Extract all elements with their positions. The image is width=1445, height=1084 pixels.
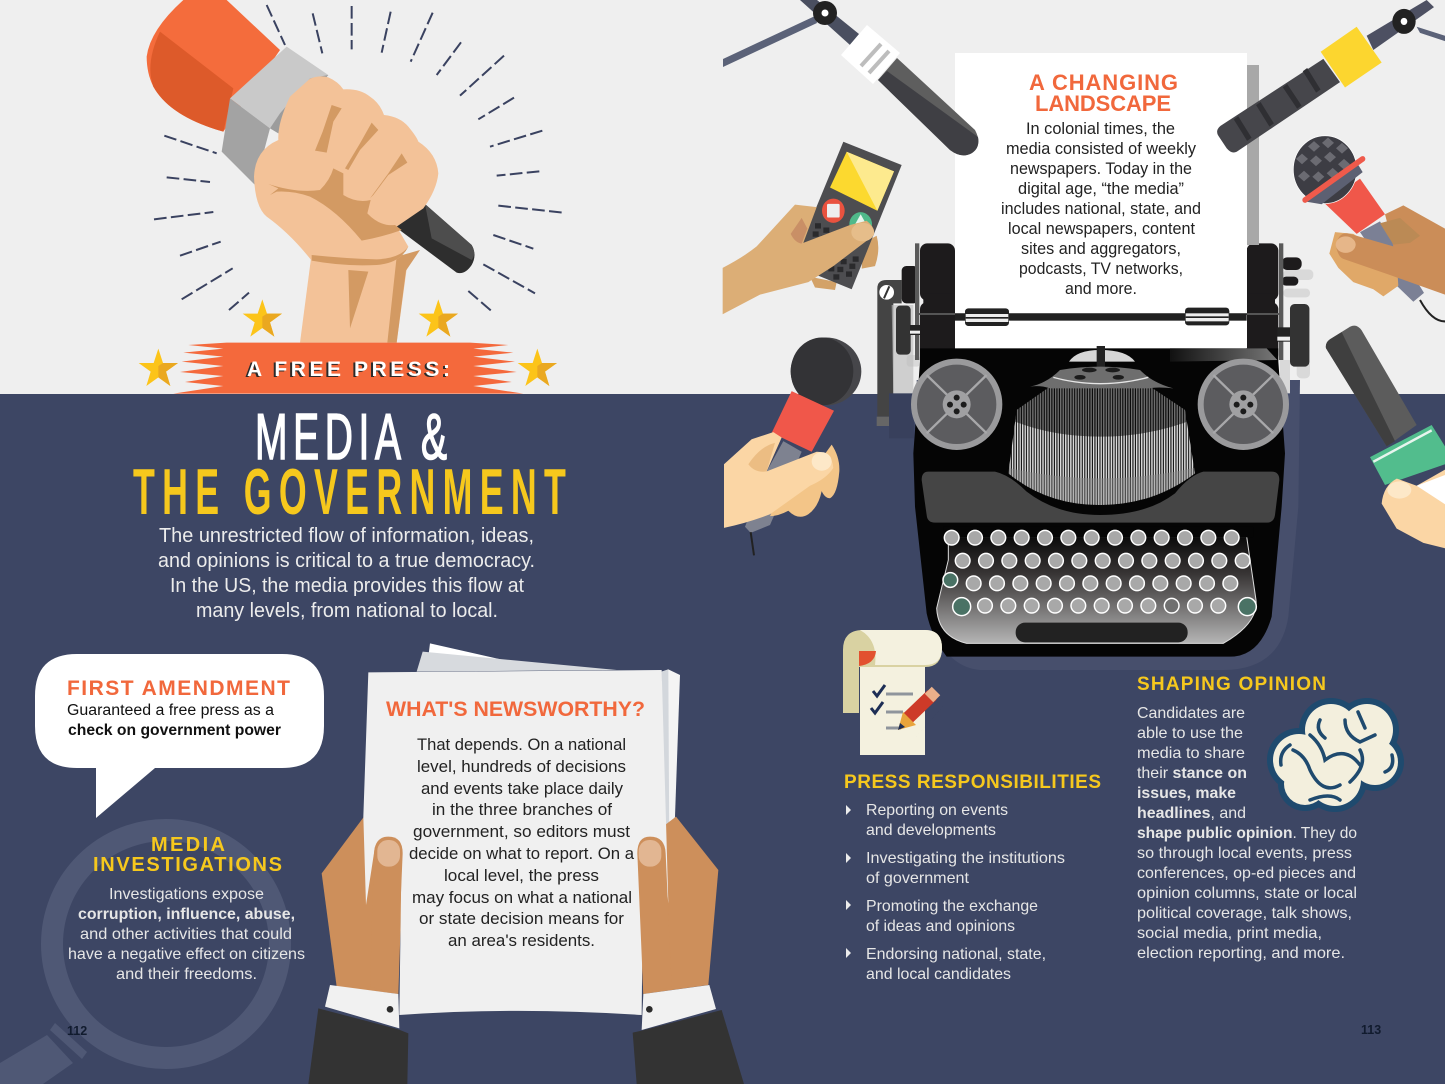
front panel	[922, 472, 1279, 523]
landscape text: In colonial times, the	[1026, 119, 1175, 138]
mic head	[147, 0, 280, 132]
boom thin arm	[723, 16, 817, 67]
heading: first amendment: FIRST AMENDMENT	[67, 677, 290, 700]
yellow band	[1321, 27, 1382, 87]
list lines	[886, 694, 913, 728]
thumbs	[370, 837, 672, 994]
intro paragraph: The unrestricted flow of information, ideas,	[159, 525, 534, 547]
white band	[841, 25, 900, 84]
illustration: hands holding newspaper	[308, 643, 744, 1084]
brain outline	[1267, 698, 1404, 812]
mic handle	[395, 203, 474, 273]
responsibilities list: Investigating the institutions	[866, 850, 1065, 867]
carriage lever	[877, 280, 914, 438]
top mask for deck edge	[943, 527, 1253, 537]
keys	[943, 530, 1256, 616]
responsibilities list: and developments	[866, 822, 996, 839]
landscape text: newspapers. Today in the	[1010, 159, 1192, 178]
boom joint	[813, 1, 837, 25]
platen knobs	[896, 304, 1309, 367]
bubble text: Guaranteed a free press as a	[67, 702, 274, 719]
landscape text: local newspapers, content	[1008, 219, 1195, 238]
scroll curl	[843, 630, 942, 713]
opinion text: their stance on	[1137, 765, 1247, 782]
investigations text: and other activities that could	[80, 926, 292, 943]
newspaper sheet	[363, 670, 668, 1015]
title	[133, 401, 566, 529]
recorder screen	[830, 152, 894, 211]
opinion text: shape public opinion. They do	[1137, 825, 1357, 842]
newsworthy text: and events take place daily	[421, 779, 623, 798]
responsibilities list	[866, 802, 1065, 983]
newsworthy text: government, so editors must	[413, 822, 630, 841]
opinion text: able to use the	[1137, 725, 1243, 742]
hand	[724, 432, 833, 528]
fist	[254, 76, 438, 265]
fingers	[770, 445, 839, 517]
forearm	[300, 250, 420, 343]
ribbon banner	[173, 343, 523, 394]
opinion text: social media, print media,	[1137, 925, 1322, 942]
opinion text: so through local events, press	[1137, 845, 1352, 862]
responsibilities list: Reporting on events	[866, 802, 1008, 819]
newsworthy text: or state decision means for	[419, 909, 624, 928]
illustration: mesh microphone and hand	[1293, 136, 1445, 321]
background: navy lower area	[0, 394, 1445, 1084]
panel: a changing landscape	[1001, 70, 1201, 298]
responsibilities list: of ideas and opinions	[866, 918, 1015, 935]
scroll page	[860, 665, 925, 755]
heading: press responsibilities: PRESS RESPONSIBILITIES	[844, 772, 1101, 793]
newsworthy text: may focus on what a national	[412, 888, 632, 907]
newsworthy text: level, hundreds of decisions	[417, 757, 626, 776]
check marks	[871, 685, 885, 713]
investigations text: corruption, influence, abuse,	[78, 906, 295, 923]
background knob shadows	[907, 269, 1313, 393]
mic body	[1326, 326, 1417, 446]
pencil	[898, 691, 946, 738]
heading: media investigations: INVESTIGATIONS	[93, 854, 282, 876]
opinion text: opinion columns, state or local	[1137, 885, 1357, 902]
opinion text: issues, make	[1137, 785, 1236, 802]
newsworthy text: in the three branches of	[432, 800, 612, 819]
opinion text: election reporting, and more.	[1137, 945, 1345, 962]
investigations text: Investigations expose	[109, 886, 264, 903]
investigations text: have a negative effect on citizens	[68, 946, 305, 963]
responsibilities list: of government	[866, 870, 970, 887]
cord	[1420, 300, 1445, 321]
typewriter front	[913, 308, 1286, 657]
illustration: hand holding recorder	[723, 142, 902, 314]
landscape text: sites and aggregators,	[1021, 239, 1181, 258]
illustration: top-right boom microphone	[1217, 0, 1445, 153]
landscape text: and more.	[1065, 279, 1137, 298]
intro paragraph: many levels, from national to local.	[196, 600, 498, 622]
panel: first amendment speech bubble	[35, 654, 324, 818]
recorder buttons	[822, 199, 872, 236]
landscape text: digital age, “the media”	[1018, 179, 1184, 198]
mic head	[791, 337, 861, 405]
opinion text: Candidates are	[1137, 705, 1245, 722]
boom arm	[1367, 0, 1434, 50]
opinion text	[1137, 705, 1357, 962]
title: MEDIA &	[255, 401, 447, 474]
panel: shaping opinion	[1137, 674, 1357, 962]
hand	[723, 205, 874, 314]
carriage blocks	[902, 243, 1302, 362]
background: top band	[0, 0, 1445, 394]
heading: shaping opinion: SHAPING OPINION	[1137, 674, 1326, 695]
handle	[878, 58, 978, 155]
mesh head	[1293, 136, 1363, 204]
green sleeve	[1370, 425, 1445, 485]
paper in typewriter	[955, 53, 1247, 348]
heading: a changing landscape: A CHANGING	[1029, 70, 1178, 95]
heading: media investigations	[93, 834, 282, 876]
panel: what's newsworthy	[386, 698, 645, 950]
page number 112: 112	[67, 1024, 87, 1038]
mic collar	[222, 47, 328, 185]
illustration: top-left boom microphone	[723, 0, 978, 155]
boom joint	[1392, 9, 1416, 34]
paper bail	[918, 308, 1280, 326]
handle	[1217, 59, 1340, 153]
icon: scroll checklist	[843, 630, 946, 755]
carriage posts	[915, 243, 1283, 360]
back pages	[417, 643, 680, 853]
panel: press responsibilities	[844, 772, 1101, 983]
sheet shadow	[1247, 65, 1259, 245]
landscape text: media consisted of weekly	[1006, 139, 1196, 158]
heading: a changing landscape: LANDSCAPE	[1035, 91, 1171, 116]
hand	[1382, 470, 1445, 548]
bubble text: check on government power	[68, 722, 281, 739]
newsworthy text	[409, 735, 635, 950]
body shadow	[917, 380, 1300, 670]
typewriter body	[913, 348, 1285, 657]
type basket hood	[1030, 367, 1173, 388]
space bar	[1016, 623, 1188, 642]
hand backs	[322, 817, 718, 994]
intro paragraph: In the US, the media provides this flow at	[170, 575, 524, 597]
carriage dome	[1069, 346, 1135, 372]
hand	[1336, 205, 1445, 295]
title: THE GOVERNMENT	[133, 457, 566, 529]
brain fill	[1273, 704, 1398, 806]
right ribbon reel	[1201, 362, 1286, 447]
panel: media investigations	[68, 834, 305, 983]
type bar fan	[1008, 388, 1195, 505]
intro paragraph: and opinions is critical to a true democracy.	[158, 550, 535, 572]
left ribbon reel	[914, 362, 999, 447]
investigations text	[68, 886, 305, 983]
heading: what's newsworthy: WHAT'S NEWSWORTHY?	[386, 698, 645, 721]
banner text: A FREE PRESS:	[247, 358, 450, 381]
illustration: hand holding black microphone	[724, 337, 861, 555]
fingers	[1329, 232, 1398, 296]
intro paragraph	[158, 525, 535, 622]
page number 113: 113	[1361, 1023, 1381, 1037]
heading: a changing landscape	[1029, 70, 1178, 116]
opinion text: conferences, op-ed pieces and	[1137, 865, 1356, 882]
mic stem	[1360, 221, 1424, 302]
illustration: green microphone and hand	[1326, 326, 1445, 548]
heading: media investigations: MEDIA	[151, 834, 225, 856]
recorder keypad	[813, 223, 859, 280]
newsworthy text: an area's residents.	[448, 931, 595, 950]
opinion text: media to share	[1137, 745, 1245, 762]
brain folds	[1281, 712, 1393, 800]
bullet markers	[846, 805, 851, 958]
responsibilities list: Endorsing national, state,	[866, 946, 1046, 963]
responsibilities list: and local candidates	[866, 966, 1011, 983]
ribbon cover strip	[1170, 348, 1277, 362]
radiating dashed lines	[154, 5, 563, 313]
newsworthy text: decide on what to report. On a	[409, 844, 635, 863]
landscape text: podcasts, TV networks,	[1019, 259, 1183, 278]
mic sleeve	[1325, 179, 1385, 234]
recorder fingers	[810, 236, 878, 290]
responsibilities list: Promoting the exchange	[866, 898, 1038, 915]
illustration: typewriter	[877, 243, 1313, 670]
boom thin arm	[1417, 27, 1445, 41]
newsworthy text: local level, the press	[444, 866, 599, 885]
red sleeve	[772, 391, 834, 452]
recorder body	[802, 142, 902, 289]
stars	[139, 299, 557, 386]
opinion text: headlines, and	[1137, 805, 1246, 822]
boom arm	[800, 0, 859, 45]
icon: magnifying glass	[0, 830, 280, 1084]
landscape text	[1001, 119, 1201, 298]
cufflinks	[387, 1006, 653, 1013]
mic stem and cord	[745, 441, 802, 555]
jacket sleeves	[308, 1008, 744, 1084]
newsworthy text: That depends. On a national	[417, 735, 626, 754]
landscape text: includes national, state, and	[1001, 199, 1201, 218]
bubble text	[67, 702, 281, 739]
opinion text: political coverage, talk shows,	[1137, 905, 1352, 922]
icon: brain	[1267, 698, 1404, 812]
illustration: fist holding microphone	[139, 0, 563, 394]
keyboard deck	[937, 537, 1256, 643]
shirt cuffs	[325, 985, 716, 1030]
investigations text: and their freedoms.	[116, 966, 257, 983]
